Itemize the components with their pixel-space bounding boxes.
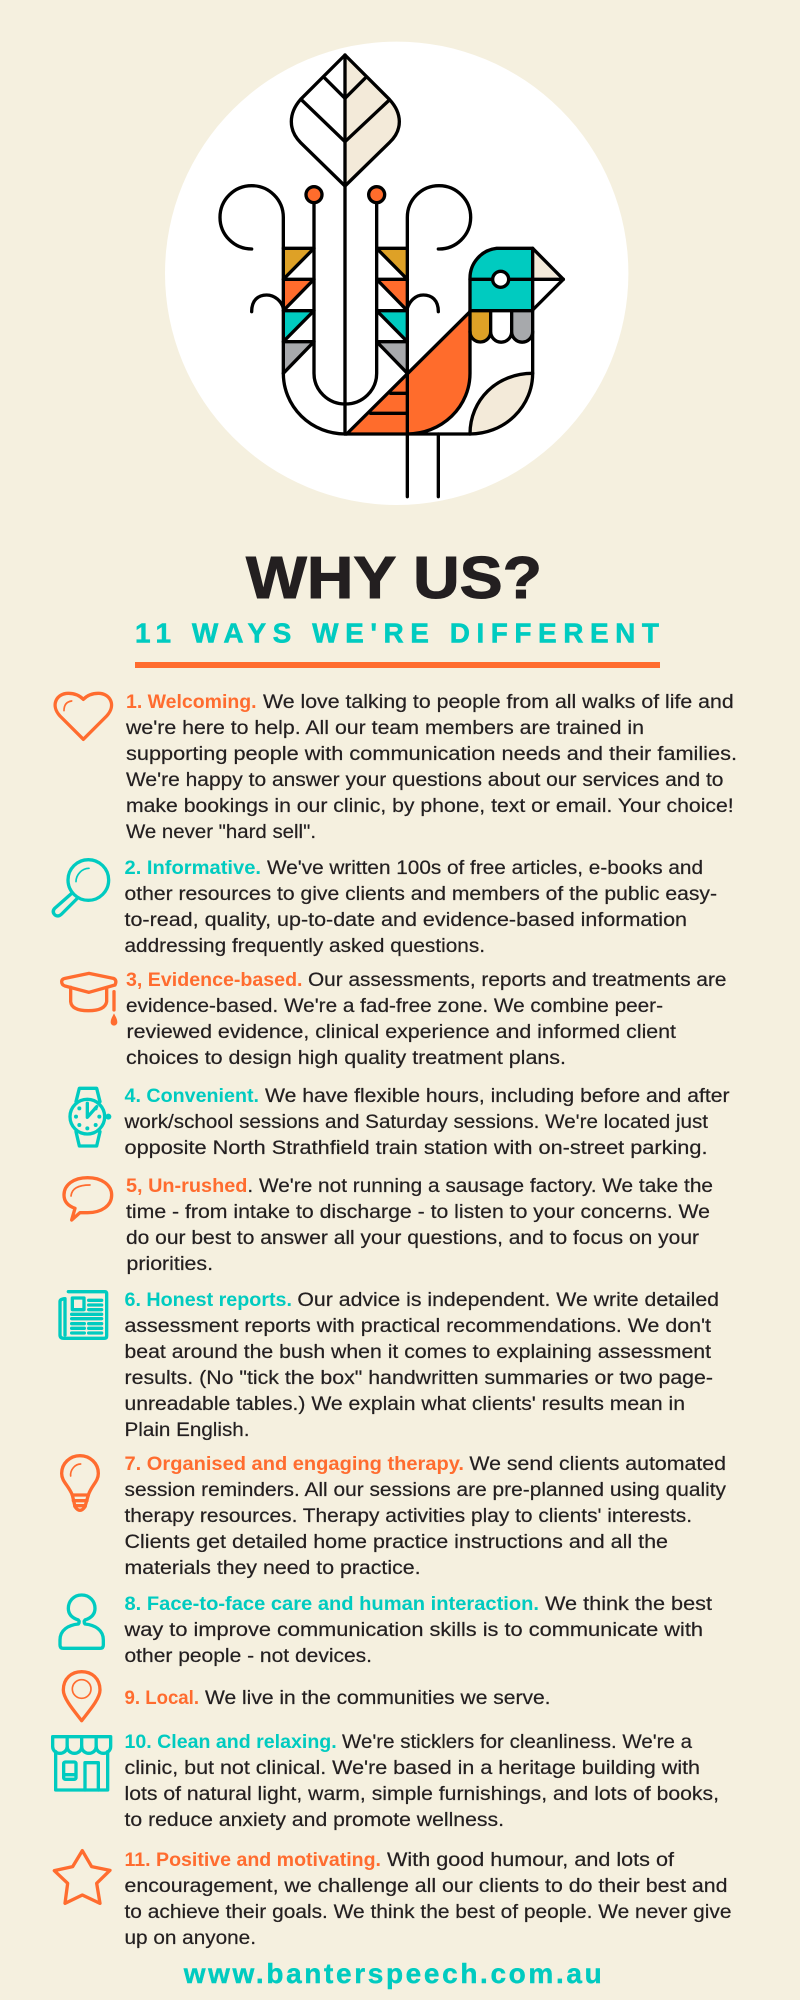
text: welcoming: We're happy to answer your questions about our services and to (126, 770, 724, 791)
text: positive and motivating (124, 1850, 732, 1949)
text: clean and relaxing: clinic, but not clinical. We're based in a heritage building with (124, 1758, 700, 1779)
text: positive and motivating: to achieve their goals. We think the best of people. We never give (124, 1902, 732, 1923)
item 2: Informative (53, 858, 717, 957)
icon: heart (55, 693, 112, 739)
text: positive and motivating: up on anyone. (124, 1928, 256, 1949)
item 6: Honest reports (60, 1290, 719, 1441)
icon: newspaper (60, 1292, 107, 1338)
item 10: Clean and relaxing (53, 1732, 719, 1831)
text: local: 9. Local. (124, 1688, 199, 1709)
icon: wristwatch (70, 1088, 111, 1146)
text: welcoming: make bookings in our clinic, by phone, text or email. Your choice! (126, 796, 734, 817)
text: evidence-based: 3, Evidence-based. (126, 970, 302, 991)
text: clean and relaxing (124, 1732, 719, 1831)
text: honest reports: 6. Honest reports. (124, 1290, 292, 1311)
text: positive and motivating: 11. Positive and motivating. (124, 1850, 381, 1871)
text: honest reports: beat around the bush when it comes to explaining assessment (124, 1342, 712, 1363)
bird outline (345, 248, 563, 497)
item 8: Face-to-face care and human interaction (60, 1594, 713, 1667)
illustration: bird and leaf in white circle (165, 42, 628, 505)
text: un-rushed: priorities. (126, 1254, 213, 1275)
item 4: Convenient (70, 1086, 730, 1159)
text: evidence-based: reviewed evidence, clinical experience and informed client (126, 1022, 677, 1043)
text: informative: addressing frequently asked questions. (124, 936, 485, 957)
text: convenient (123, 1086, 730, 1159)
text: welcoming: 1. Welcoming. (126, 692, 257, 713)
item 11: Positive and motivating (54, 1850, 732, 1949)
text: clean and relaxing: to reduce anxiety and promote wellness. (124, 1810, 504, 1831)
text: informative: 2. Informative. (124, 858, 261, 879)
icon: map pin (63, 1672, 100, 1721)
text: convenient: We have flexible hours, including before and after (265, 1086, 730, 1107)
text: convenient: 4. Convenient. (124, 1086, 259, 1107)
text: welcoming (125, 692, 737, 843)
text: un-rushed: . We're not running a sausage factory. We take the (247, 1176, 713, 1197)
item 7: Organised and engaging therapy (62, 1454, 727, 1579)
subtitle: 11 WAYS WE'RE DIFFERENT (135, 618, 659, 648)
text: organised: Clients get detailed home practice instructions and all the (124, 1532, 668, 1553)
text: convenient: work/school sessions and Saturday sessions. We're located just (123, 1112, 709, 1133)
text: evidence-based: choices to design high quality treatment plans. (126, 1048, 566, 1069)
title: WHY US? (246, 545, 542, 611)
text: face-to-face: We think the best (545, 1594, 713, 1615)
text: organised: We send clients automated (469, 1454, 726, 1475)
text: honest reports (124, 1290, 719, 1441)
text: honest reports: unreadable tables.) We explain what clients' results mean in (124, 1394, 685, 1415)
text: convenient: opposite North Strathfield train station with on-street parking. (124, 1138, 708, 1159)
text: organised: materials they need to practice. (124, 1558, 420, 1579)
text: informative: other resources to give clients and members of the public easy- (124, 884, 717, 905)
text: honest reports: Our advice is independent. We write detailed (297, 1290, 719, 1311)
text: local: We live in the communities we serve. (205, 1688, 550, 1709)
text: evidence-based: Our assessments, reports and treatments are (308, 970, 726, 991)
text: organised: therapy resources. Therapy activities play to clients' interests. (124, 1506, 692, 1527)
item 5: Un-rushed (64, 1176, 713, 1275)
bird colour fills (347, 248, 559, 434)
item 9: Local (63, 1672, 550, 1721)
item 1: Welcoming (55, 692, 737, 843)
tail feather triangles, left and right (283, 248, 407, 373)
text: organised (124, 1454, 727, 1579)
icon: graduation cap (62, 973, 117, 1026)
text: evidence-based: evidence-based. We're a fad-free zone. We combine peer- (126, 996, 663, 1017)
text: face-to-face: 8. Face-to-face care and human interaction. (124, 1594, 539, 1615)
icon: person (60, 1595, 103, 1648)
text: informative (124, 858, 717, 957)
text: organised: 7. Organised and engaging therapy. (124, 1454, 464, 1475)
icon: shop front (53, 1737, 111, 1790)
icon: star (54, 1851, 110, 1903)
text: clean and relaxing: 10. Clean and relaxing. (124, 1732, 337, 1753)
text: honest reports: results. (No "tick the box" handwritten summaries or two page- (124, 1368, 713, 1389)
text: un-rushed (126, 1176, 713, 1275)
text: un-rushed: time - from intake to discharge - to listen to your concerns. We (126, 1202, 710, 1223)
text: honest reports: Plain English. (124, 1420, 250, 1441)
orange divider bar (135, 662, 660, 668)
text: un-rushed: do our best to answer all your questions, and to focus on your (126, 1228, 700, 1249)
item 3: Evidence-based (62, 970, 727, 1069)
text: evidence-based (126, 970, 726, 1069)
text: informative: We've written 100s of free articles, e-books and (267, 858, 703, 879)
text: welcoming: supporting people with communication needs and their families. (126, 744, 737, 765)
leaf (291, 55, 399, 186)
text: face-to-face: way to improve communication skills is to communicate with (123, 1620, 703, 1641)
text: welcoming: we're here to help. All our team members are trained in (125, 718, 644, 739)
text: un-rushed: 5, Un-rushed (126, 1176, 247, 1197)
text: honest reports: assessment reports with practical recommendations. We don't (124, 1316, 712, 1337)
text: organised: session reminders. All our sessions are pre-planned using quality (124, 1480, 727, 1501)
text: face-to-face (123, 1594, 713, 1667)
website url: www.banterspeech.com.au (183, 1958, 602, 1989)
text: welcoming: We love talking to people from all walks of life and (263, 692, 734, 713)
icon: speech bubble (64, 1178, 112, 1220)
text: face-to-face: other people - not devices. (124, 1646, 372, 1667)
text: clean and relaxing: lots of natural light, warm, simple furnishings, and lots of books, (124, 1784, 719, 1805)
text: positive and motivating: With good humour, and lots of (387, 1850, 675, 1871)
icon: light bulb (62, 1456, 98, 1510)
icon: magnifying glass (53, 860, 109, 916)
text: clean and relaxing: We're sticklers for cleanliness. We're a (342, 1732, 692, 1753)
text: welcoming: We never "hard sell". (126, 822, 316, 843)
curled stems (220, 55, 471, 497)
text: informative: to-read, quality, up-to-date and evidence-based information (124, 910, 687, 931)
text: positive and motivating: encouragement, we challenge all our clients to do their best and (124, 1876, 728, 1897)
